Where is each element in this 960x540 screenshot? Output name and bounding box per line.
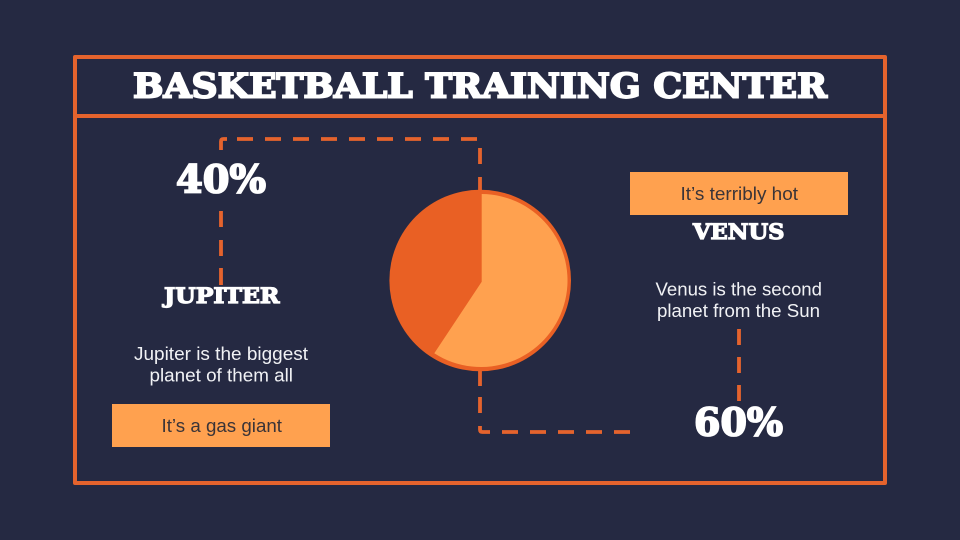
text block: Jupiter description xyxy=(134,344,308,386)
heading: Venus: VENUS xyxy=(692,219,784,244)
slice: 60% share xyxy=(434,194,568,367)
callout: Venus: It’s terribly hot xyxy=(680,184,798,204)
pie chart xyxy=(389,190,571,371)
connector: pie to 60% xyxy=(480,371,630,432)
panel: outer frame with title divider xyxy=(75,57,885,483)
title: BASKETBALL TRAINING CENTER xyxy=(133,66,828,106)
callout: Jupiter xyxy=(112,404,330,447)
text block: Venus description: planet from the Sun xyxy=(657,301,820,321)
connector: Venus text to 60% xyxy=(737,329,741,401)
callout: Venus xyxy=(630,172,848,215)
slice: 40% share xyxy=(389,190,571,371)
stat: 40%: 40% xyxy=(176,156,266,202)
text block: Jupiter description: planet of them all xyxy=(150,366,293,386)
stat: 60%: 60% xyxy=(694,400,783,444)
text block: Jupiter description: Jupiter is the biggest xyxy=(134,344,308,364)
callout: Jupiter: It’s a gas giant xyxy=(162,416,282,436)
text block: Venus description xyxy=(656,280,822,321)
heading: Jupiter: JUPITER xyxy=(162,283,280,308)
text block: Venus description: Venus is the second xyxy=(656,280,822,300)
connector: 40% to pie xyxy=(221,139,480,285)
